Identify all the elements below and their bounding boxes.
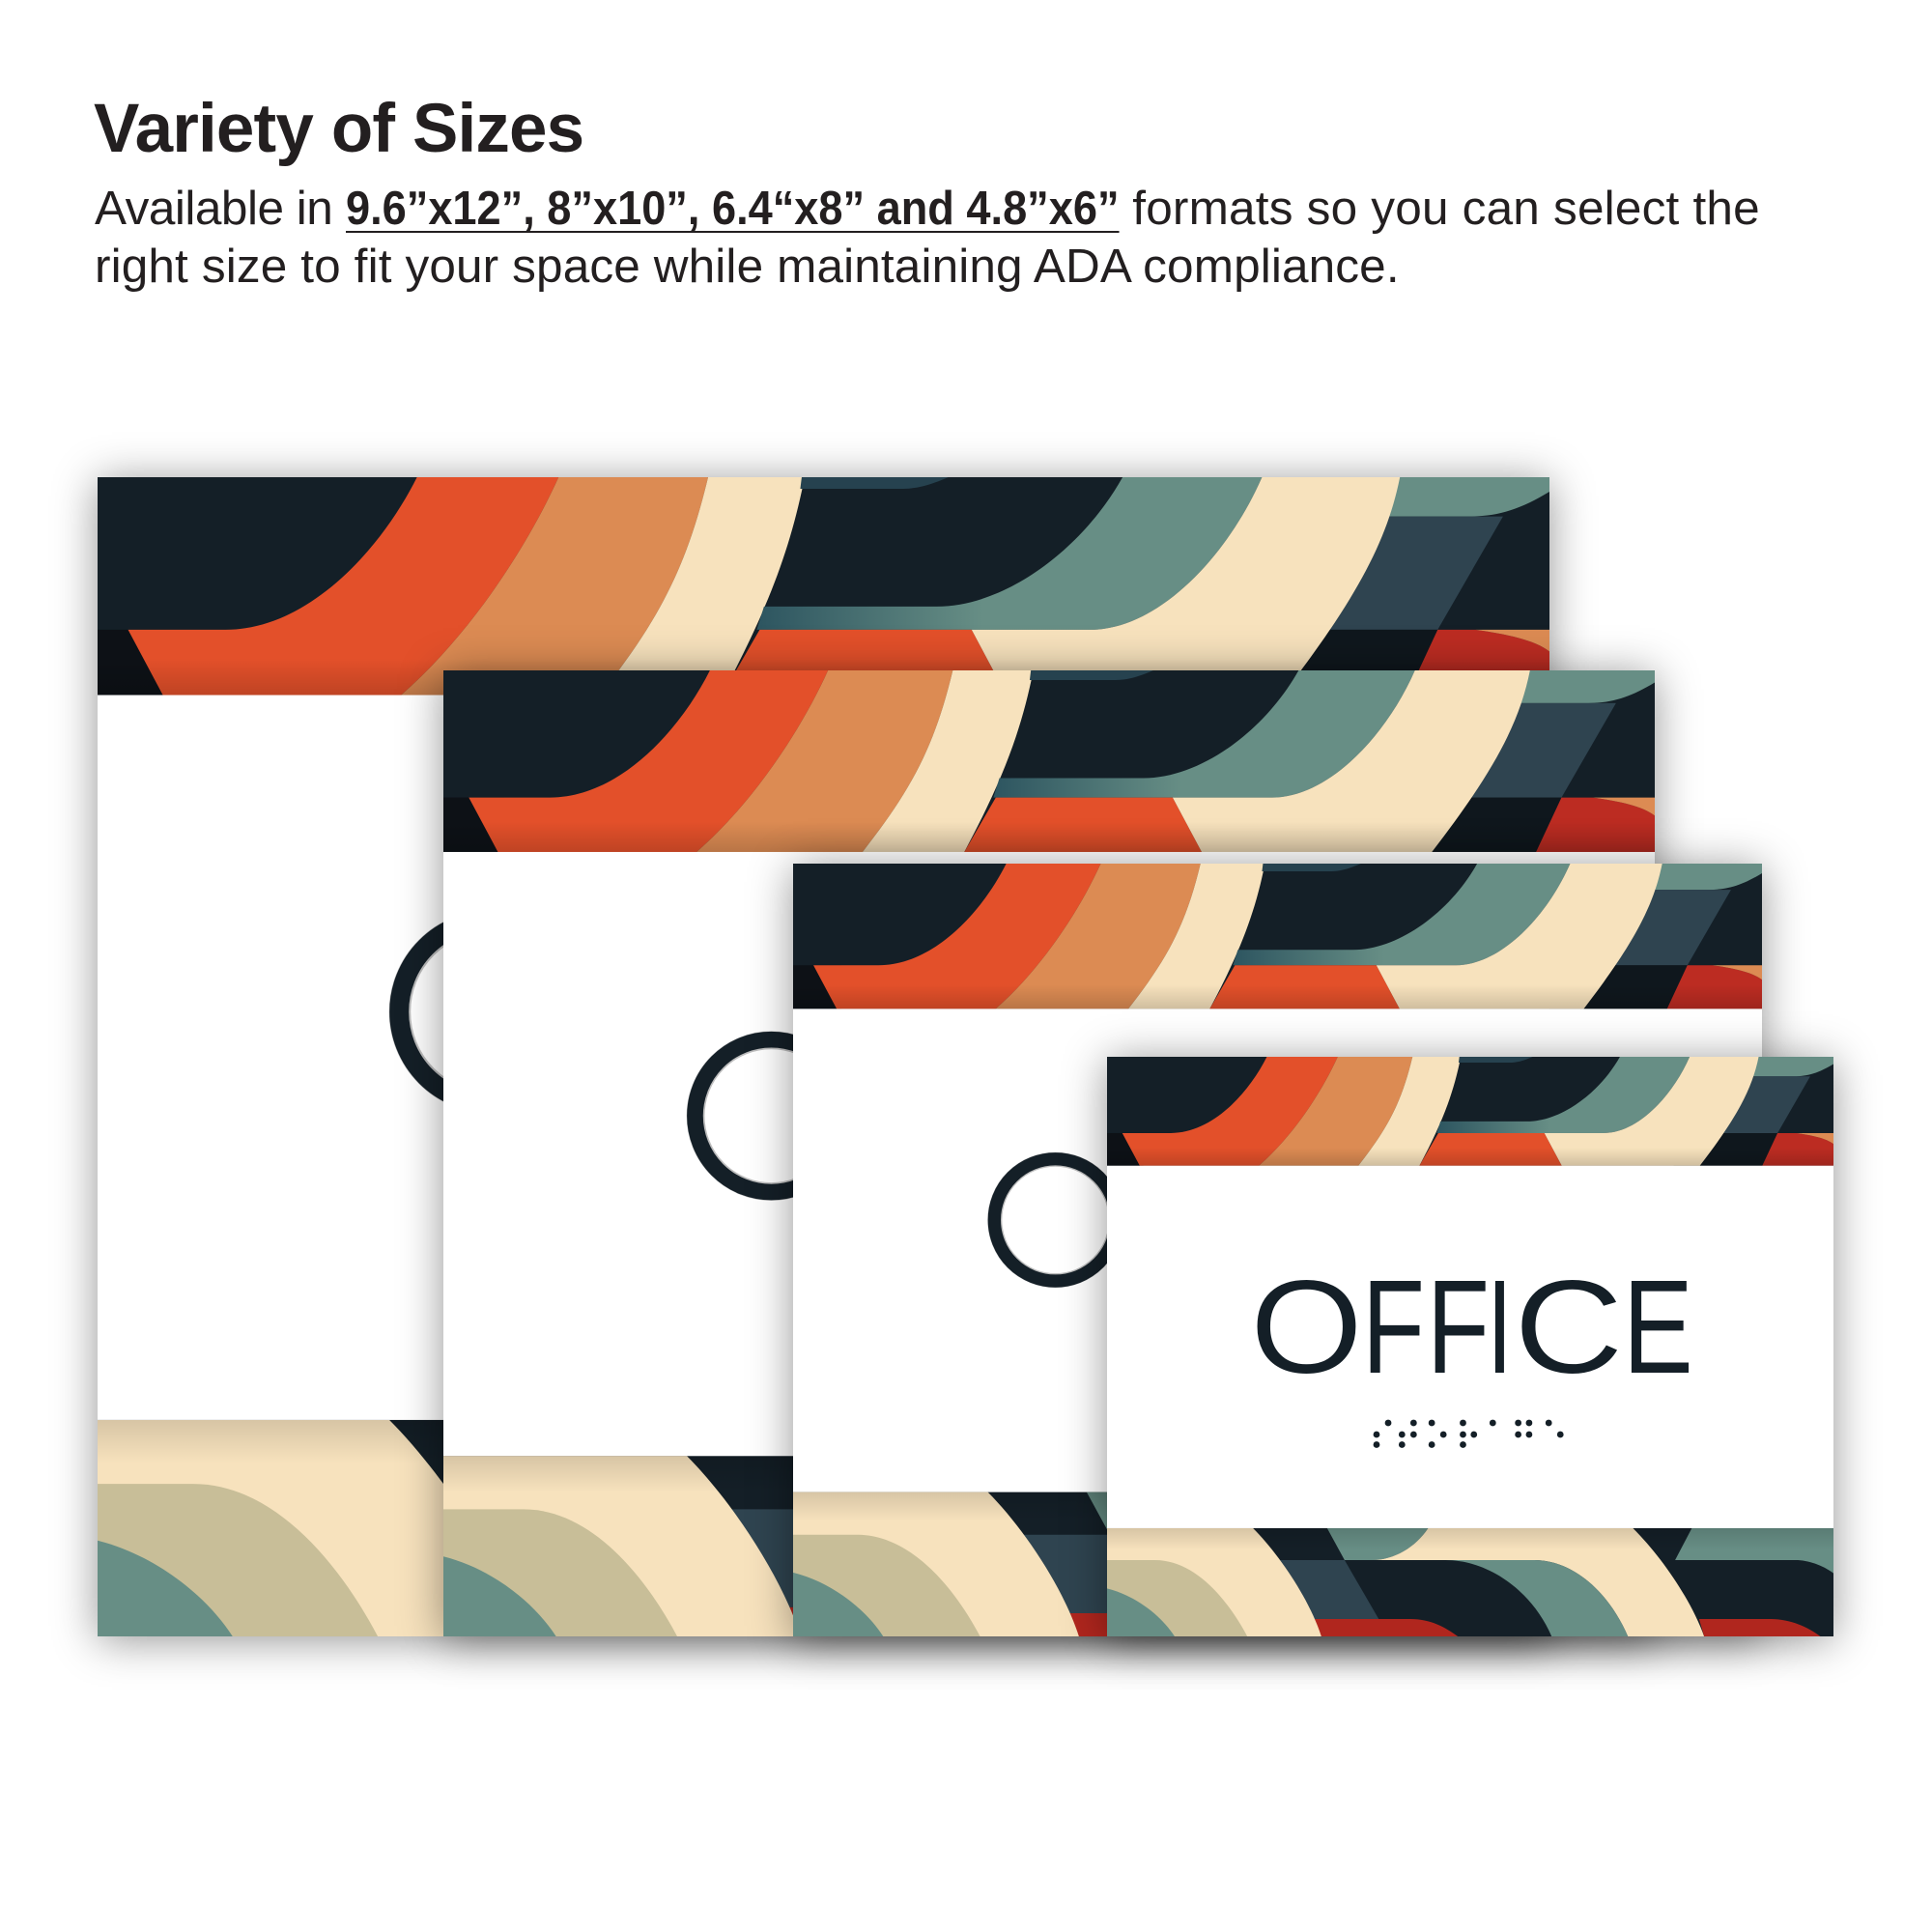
description text: 9.6”x12”, 8”x10”, 6.4“x8” and 4.8”x6” — [346, 182, 1119, 235]
braille dots — [1374, 1420, 1564, 1448]
sign: 6.4 x 8 size — [793, 864, 1762, 1636]
OFFICE sign text: C — [1514, 1253, 1624, 1402]
OFFICE sign text: F — [1427, 1253, 1490, 1402]
description text: right size to fit your space while maintaining ADA compliance. — [95, 240, 1400, 293]
OFFICE sign text — [1250, 1253, 1693, 1402]
OFFICE sign text: O — [1250, 1253, 1363, 1402]
OFFICE sign text: F — [1362, 1253, 1425, 1402]
title: Variety of Sizes — [94, 91, 583, 167]
description text: Available in formats so you can select the — [95, 182, 1760, 235]
sign: 4.8 x 6 size with OFFICE text and braille — [1107, 1057, 1833, 1636]
sign: 8 x 10 size — [443, 670, 1655, 1636]
OFFICE sign text: E — [1623, 1253, 1693, 1402]
description text — [95, 182, 1760, 293]
OFFICE sign text: I — [1487, 1253, 1513, 1402]
sign: 9.6 x 12 size — [98, 477, 1549, 1636]
